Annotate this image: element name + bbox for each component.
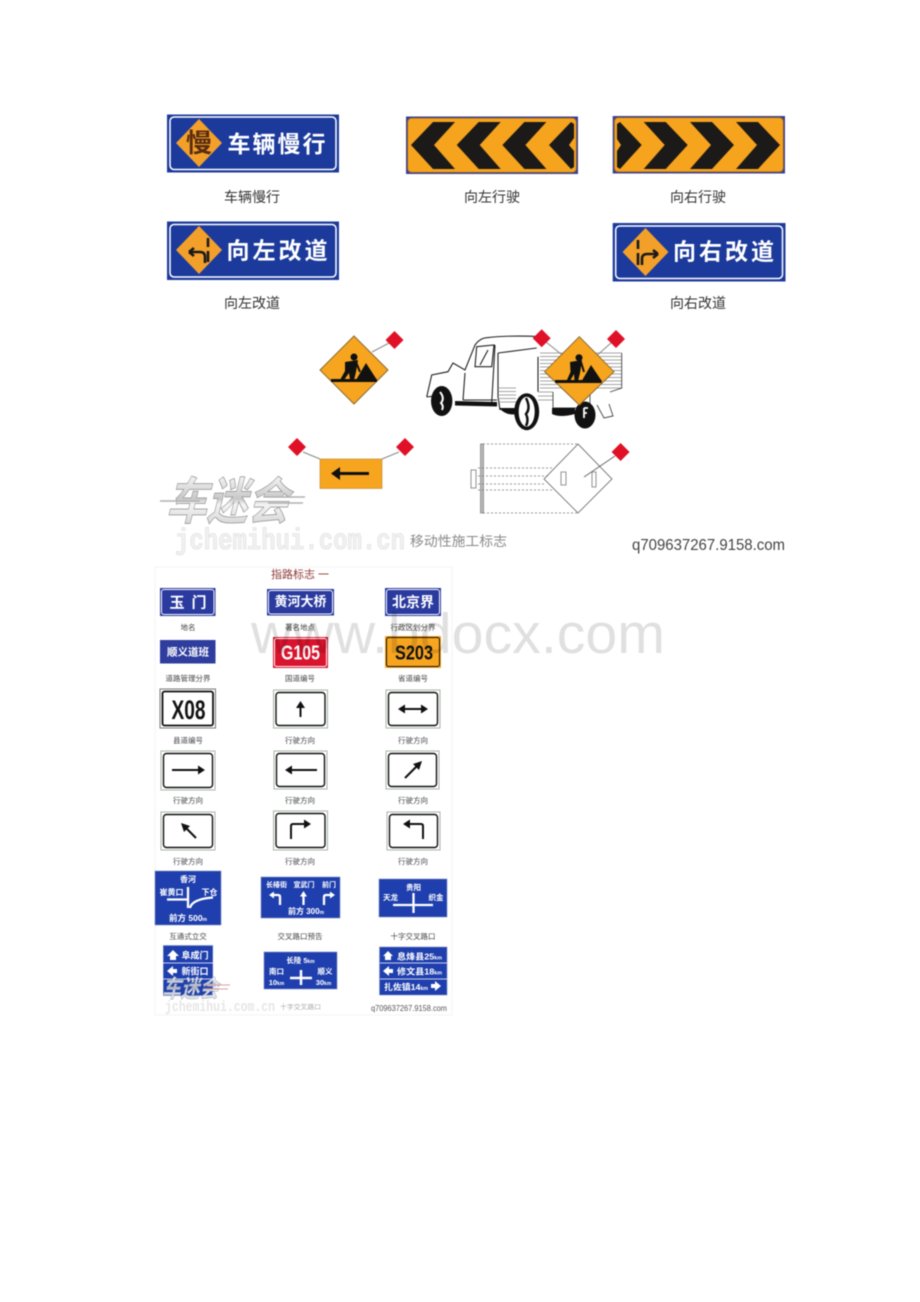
sign: county road: X08 xyxy=(172,695,206,725)
sign: provincial road: S203 xyxy=(395,642,433,664)
logo: chemihui watermark: jchemihui.com.cn xyxy=(175,525,405,559)
sign: junction with distances: 长陵 5km xyxy=(286,955,315,965)
source url: q709637267.9158.com xyxy=(632,537,785,554)
sign: admin boundary xyxy=(385,588,441,616)
logo: chemihui watermark xyxy=(160,474,405,559)
caption: 行驶方向 xyxy=(173,795,203,805)
sign: keep right chevrons xyxy=(613,116,785,174)
sign: crossroads: 贵阳 xyxy=(406,882,421,892)
sign: junction with distances: 顺义 xyxy=(318,967,333,976)
sign: junction with distances: 30km xyxy=(316,978,332,987)
sign: direction right xyxy=(161,751,215,790)
sign: junction ahead: 长椿街 xyxy=(266,880,287,889)
caption: 十字交叉路口 xyxy=(280,1002,321,1011)
sign: national road xyxy=(273,637,328,668)
caption: 行驶方向 xyxy=(398,735,428,745)
sign: famous place xyxy=(267,589,334,616)
illustration: truck carrying sign xyxy=(427,329,625,430)
sign: place name: 玉门 xyxy=(170,594,206,612)
sign: worker diamond with flag xyxy=(320,331,404,404)
panel: guide signs chart xyxy=(155,567,452,1016)
sign: junction ahead xyxy=(261,877,340,918)
heading: guide signs: 指路标志 一 xyxy=(271,567,329,581)
sign: junction ahead: 前门 xyxy=(322,880,336,889)
watermark: site address: www.bdocx.com xyxy=(250,602,665,666)
sign: national road: G105 xyxy=(281,642,320,664)
sign: junction with distances: 10km xyxy=(269,978,285,987)
caption: 著名地点 xyxy=(285,622,315,632)
caption: change lane left: 向左改道 xyxy=(224,295,280,311)
logo: chemihui watermark small xyxy=(161,976,275,1016)
caption: mobile construction signs: 移动性施工标志 xyxy=(410,534,507,549)
panel: mobile construction signs xyxy=(160,114,786,559)
sign: provincial road xyxy=(385,636,441,668)
sign: stacked destinations xyxy=(163,946,213,996)
sign: vehicles slow: 慢 xyxy=(186,128,212,158)
logo: chemihui watermark small: jchemihui.com.cn xyxy=(165,999,275,1016)
logo: chemihui watermark small: 车迷会 xyxy=(161,976,223,1003)
caption: 道路管理分界 xyxy=(166,673,211,683)
caption: 行驶方向 xyxy=(173,856,203,866)
caption: change lane right: 向右改道 xyxy=(670,295,726,311)
sign: left arrow board with flags xyxy=(288,438,414,488)
sign: change lane left: 向左改道 xyxy=(226,238,328,264)
caption: 行驶方向 xyxy=(285,735,315,745)
sign: change lane right xyxy=(613,223,786,282)
caption: 地名 xyxy=(180,622,196,632)
sign: stacked destinations: 阜成门 xyxy=(181,950,209,960)
sign: three destinations with distances: 息烽县25 km xyxy=(397,952,443,962)
sign: crossroads: 织金 xyxy=(428,892,444,902)
sign: three destinations with distances: 扎佐镇14 km xyxy=(384,982,429,992)
sign: junction with distances xyxy=(264,952,337,989)
sign: three destinations with distances: 修文县18 km xyxy=(397,966,443,976)
sign: crossroads: 天龙 xyxy=(383,892,398,902)
caption: 行驶方向 xyxy=(398,856,428,866)
sign: keep left chevrons xyxy=(406,116,578,174)
sign: direction both ways xyxy=(386,690,440,728)
sign: change lane right: 向右改道 xyxy=(673,238,774,264)
sign: place name xyxy=(160,588,216,616)
sign: road management boundary: 顺义道班 xyxy=(167,646,210,658)
sign: direction up xyxy=(274,690,328,728)
caption: 十字交叉路口 xyxy=(390,931,436,941)
caption: vehicles slow: 车辆慢行 xyxy=(224,189,280,205)
caption: 行政区划分界 xyxy=(390,622,436,632)
sign: road management boundary xyxy=(160,640,216,664)
sign: stacked destinations: 新街口 xyxy=(181,966,209,976)
sign: county road xyxy=(160,689,216,728)
sign: direction up-left xyxy=(161,812,215,850)
sign: vehicles slow: 车辆慢行 xyxy=(228,131,326,157)
caption: 行驶方向 xyxy=(285,856,315,866)
caption: 省道编号 xyxy=(398,673,428,683)
caption: 行驶方向 xyxy=(398,795,428,805)
caption: keep left: 向左行驶 xyxy=(464,189,520,205)
sign: vehicles slow xyxy=(167,114,339,172)
sign: junction with distances: 南口 xyxy=(269,966,284,976)
sign: turn right xyxy=(274,811,328,850)
sign: interchange: 前方 500m xyxy=(169,913,208,923)
sign: three destinations with distances xyxy=(380,947,447,995)
sign: admin boundary: 北京界 xyxy=(392,594,434,610)
sign: direction left xyxy=(274,751,327,789)
sign: crossroads xyxy=(379,879,447,917)
sign: junction ahead: 前方 300m xyxy=(288,906,325,916)
sign: direction up-right xyxy=(386,751,439,789)
diagram: diamond sign mounting outline xyxy=(471,443,630,513)
sign: interchange: 香河 xyxy=(180,874,196,884)
caption: 互通式立交 xyxy=(169,931,207,941)
sign: famous place: 黄河大桥 xyxy=(274,594,326,609)
sign: interchange: 崔黄口 xyxy=(160,887,184,897)
sign: junction ahead: 宣武门 xyxy=(294,880,314,889)
sign: change lane left xyxy=(167,222,339,280)
sign: interchange xyxy=(155,871,221,925)
caption: 交叉路口预告 xyxy=(278,931,323,941)
caption: 国道编号 xyxy=(285,673,315,683)
caption: keep right: 向右行驶 xyxy=(670,189,726,205)
caption: 行驶方向 xyxy=(285,795,315,805)
sign: interchange: 下仓 xyxy=(202,887,218,897)
sign: turn left xyxy=(387,812,440,850)
caption: 县道编号 xyxy=(173,735,203,745)
source url small: q709637267.9158.com xyxy=(371,1004,447,1013)
logo: chemihui watermark: 车迷会 xyxy=(163,474,299,530)
